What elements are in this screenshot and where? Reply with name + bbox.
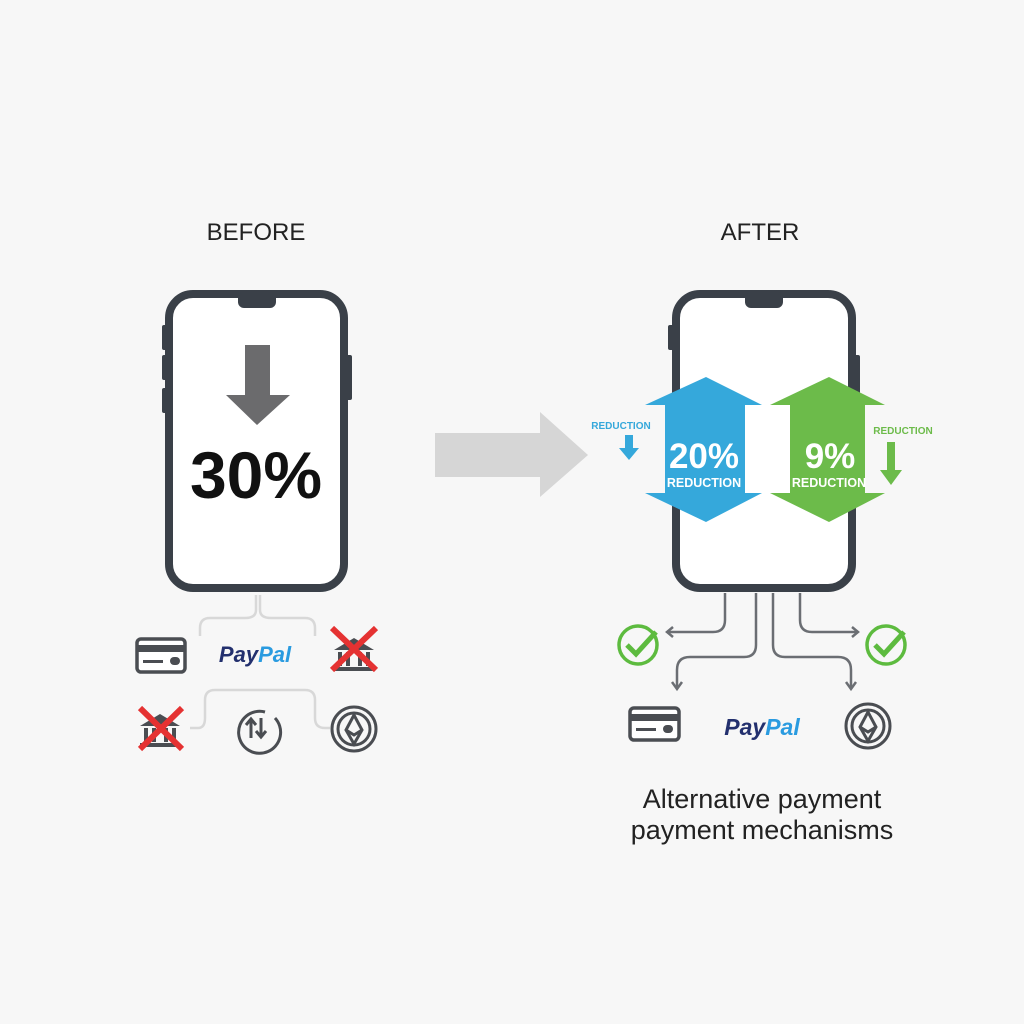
icon: check right — [867, 626, 905, 664]
arrow: blue 20% — [645, 377, 762, 522]
icon: credit card — [137, 639, 185, 672]
icon: down arrow — [226, 345, 290, 425]
icon: bank crossed 2 — [140, 708, 182, 749]
heading: before: BEFORE — [207, 219, 305, 246]
logo: paypal after: PayPal — [724, 714, 800, 740]
connectors: before — [190, 595, 330, 728]
logo: paypal: PayPal — [219, 642, 292, 667]
icon: credit card after — [630, 708, 679, 740]
icon: bank crossed — [332, 628, 376, 671]
arrow: blue 20%: REDUCTION — [667, 476, 741, 490]
phone: after — [668, 292, 860, 588]
label: blue reduction: REDUCTION — [591, 421, 651, 432]
arrow: blue 20%: 20% — [669, 437, 739, 476]
caption: Alternative payment — [643, 784, 882, 814]
stat: 30%: 30% — [190, 438, 322, 512]
label: blue reduction — [591, 421, 651, 460]
arrow: transition — [435, 412, 588, 497]
icon: crypto coin — [332, 707, 376, 751]
caption: payment mechanisms — [631, 815, 893, 845]
connectors: after — [667, 593, 858, 689]
arrow: green 9%: REDUCTION — [792, 476, 866, 490]
arrow: green 9% — [770, 377, 885, 522]
label: green reduction: REDUCTION — [873, 426, 933, 437]
caption — [631, 784, 893, 845]
icon: check left — [619, 626, 657, 664]
icon: crypto coin after — [846, 704, 890, 748]
label: green reduction — [873, 426, 933, 485]
heading: after: AFTER — [721, 219, 799, 246]
icon: exchange — [239, 711, 281, 753]
phone: before — [162, 292, 352, 588]
arrow: green 9%: 9% — [805, 437, 855, 476]
